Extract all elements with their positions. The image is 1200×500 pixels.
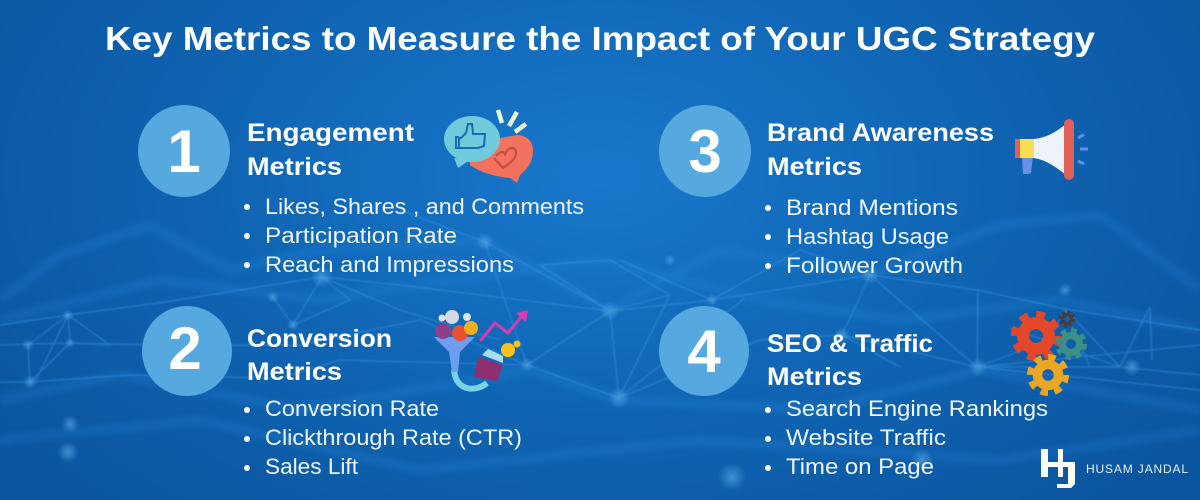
icon: megaphone — [1015, 119, 1088, 180]
heading: seo and traffic metrics: SEO & Traffic — [767, 330, 933, 358]
heading: brand awareness metrics: Metrics — [767, 153, 862, 181]
bullet list: Clickthrough Rate (CTR) — [265, 425, 522, 450]
number badge 1 — [138, 105, 230, 197]
bullet list: Hashtag Usage — [786, 224, 949, 249]
number badge 2 — [142, 306, 232, 396]
bullet list: Conversion Rate — [265, 396, 439, 421]
bullet list: Search Engine Rankings — [786, 396, 1048, 421]
heading: seo and traffic metrics: Metrics — [767, 363, 862, 391]
panel: conversion metrics — [142, 306, 528, 479]
number badge 4: 4 — [687, 318, 721, 385]
icon: like and heart speech bubbles — [444, 110, 533, 183]
number badge 2: 2 — [168, 315, 202, 382]
bullet list — [244, 194, 584, 277]
logo wordmark: HUSAM JANDAL — [1086, 462, 1188, 476]
title: Key Metrics to Measure the Impact of Your UGC Strategy — [105, 20, 1096, 57]
number badge 1: 1 — [167, 118, 201, 185]
bullet list: Time on Page — [786, 454, 934, 479]
icon: gears — [1014, 312, 1084, 393]
bullet list: Participation Rate — [265, 223, 457, 248]
panel: engagement metrics — [138, 105, 584, 277]
heading: engagement metrics: Metrics — [247, 153, 342, 181]
bullet list: Sales Lift — [265, 454, 358, 479]
bullet list: Website Traffic — [786, 425, 946, 450]
logo mark — [1041, 449, 1075, 488]
logo: husam jandal — [1041, 449, 1188, 488]
bullet list — [765, 195, 963, 278]
panel: brand awareness metrics — [659, 105, 1088, 278]
number badge 4 — [659, 306, 749, 396]
bullet list — [244, 396, 522, 479]
heading: conversion metrics: Conversion — [247, 325, 392, 353]
heading: conversion metrics: Metrics — [247, 358, 342, 386]
icon: funnel and growth arrow — [434, 310, 528, 389]
heading: brand awareness metrics: Brand Awareness — [767, 119, 994, 147]
heading: engagement metrics: Engagement — [247, 119, 415, 147]
number badge 3: 3 — [688, 118, 722, 185]
number badge 3 — [659, 105, 751, 197]
bullet list: Likes, Shares , and Comments — [265, 194, 584, 219]
bullet list: Follower Growth — [786, 253, 963, 278]
bullet list: Brand Mentions — [786, 195, 958, 220]
bullet list: Reach and Impressions — [265, 252, 514, 277]
bullet list — [765, 396, 1048, 479]
background network pattern — [0, 210, 1200, 491]
panel: seo and traffic metrics — [659, 306, 1084, 479]
